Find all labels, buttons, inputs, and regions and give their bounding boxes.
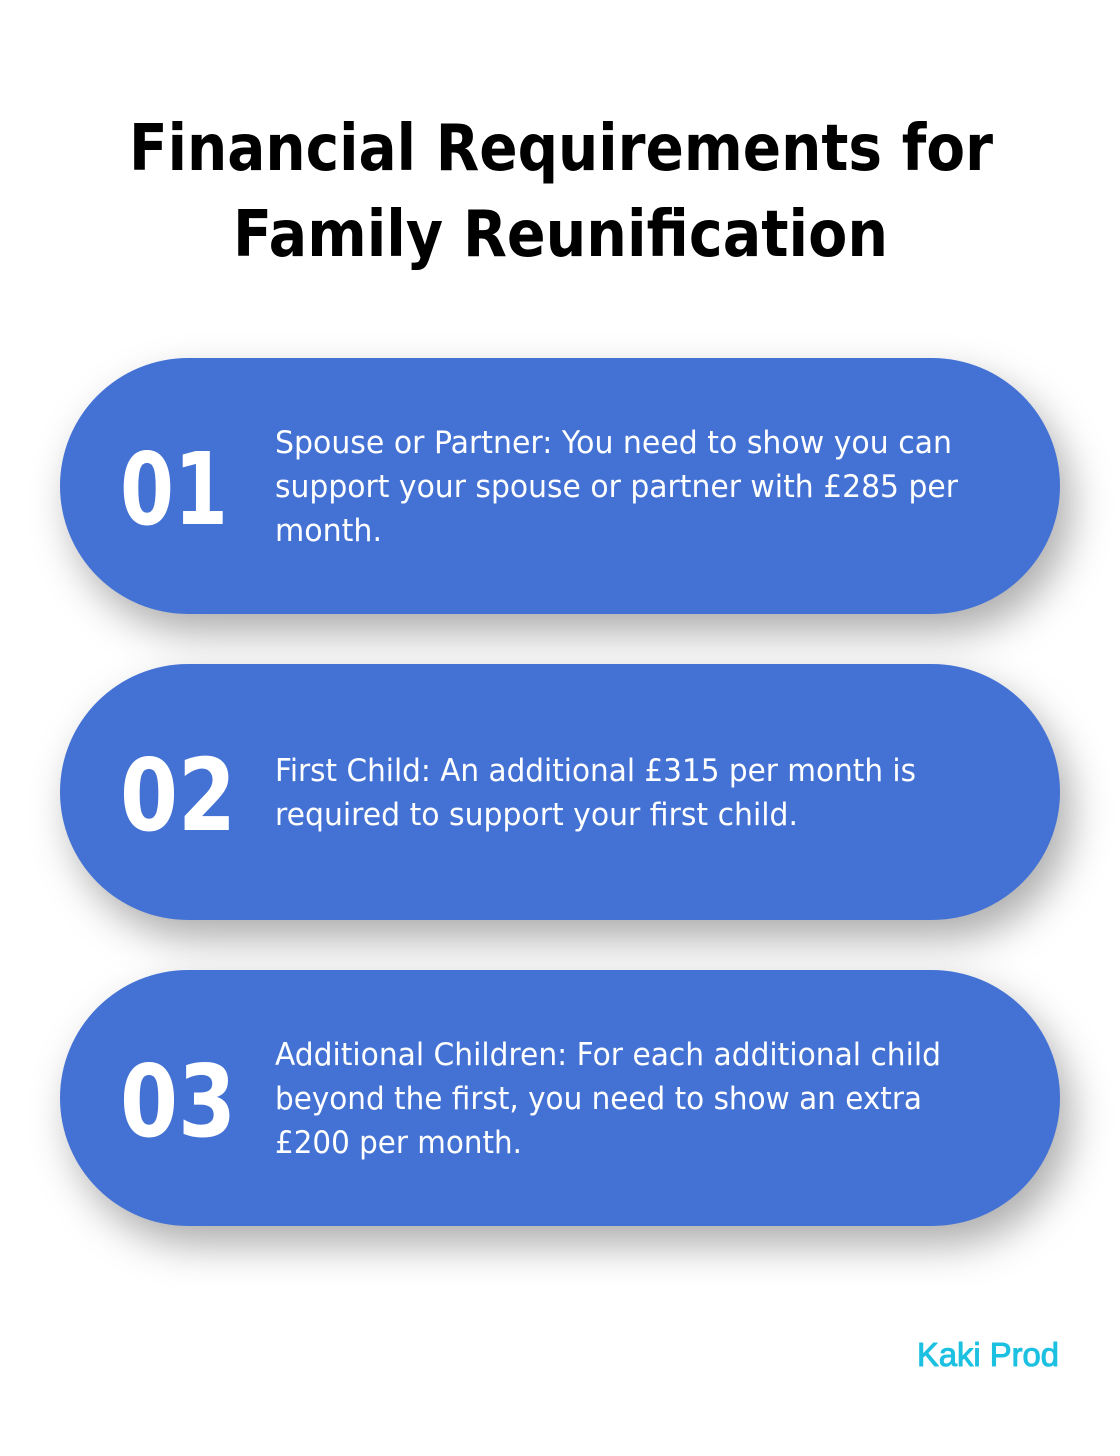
number 03: 03 bbox=[120, 1043, 236, 1160]
title bbox=[129, 112, 993, 272]
text block 2: First Child: An additional £315 per month is bbox=[275, 753, 916, 789]
text block 1: Spouse or Partner: You need to show you can bbox=[275, 425, 952, 461]
text block 3: Additional Children: For each additional child bbox=[275, 1037, 941, 1073]
text block 3: beyond the first, you need to show an extra bbox=[275, 1081, 922, 1117]
text block 1: month. bbox=[275, 513, 382, 549]
pill background 3 bbox=[60, 970, 1060, 1226]
text block 3 bbox=[275, 1037, 941, 1161]
text block 1: support your spouse or partner with £285 per bbox=[275, 469, 958, 505]
text block 2 bbox=[275, 753, 916, 833]
text block 2: required to support your first child. bbox=[275, 797, 798, 833]
number 02: 02 bbox=[120, 737, 236, 854]
title: Family Reunification bbox=[233, 198, 888, 272]
logo: Kaki Prod: Kaki Prod bbox=[917, 1336, 1059, 1373]
number 01: 01 bbox=[120, 431, 228, 548]
panel: first child bbox=[60, 664, 1060, 920]
panel: additional children bbox=[60, 970, 1060, 1226]
text block 1 bbox=[275, 425, 958, 549]
title: Financial Requirements for bbox=[129, 112, 993, 186]
pill background 1 bbox=[60, 358, 1060, 614]
panel: spouse or partner bbox=[60, 358, 1060, 614]
text block 3: £200 per month. bbox=[275, 1125, 522, 1161]
pill background 2 bbox=[60, 664, 1060, 920]
